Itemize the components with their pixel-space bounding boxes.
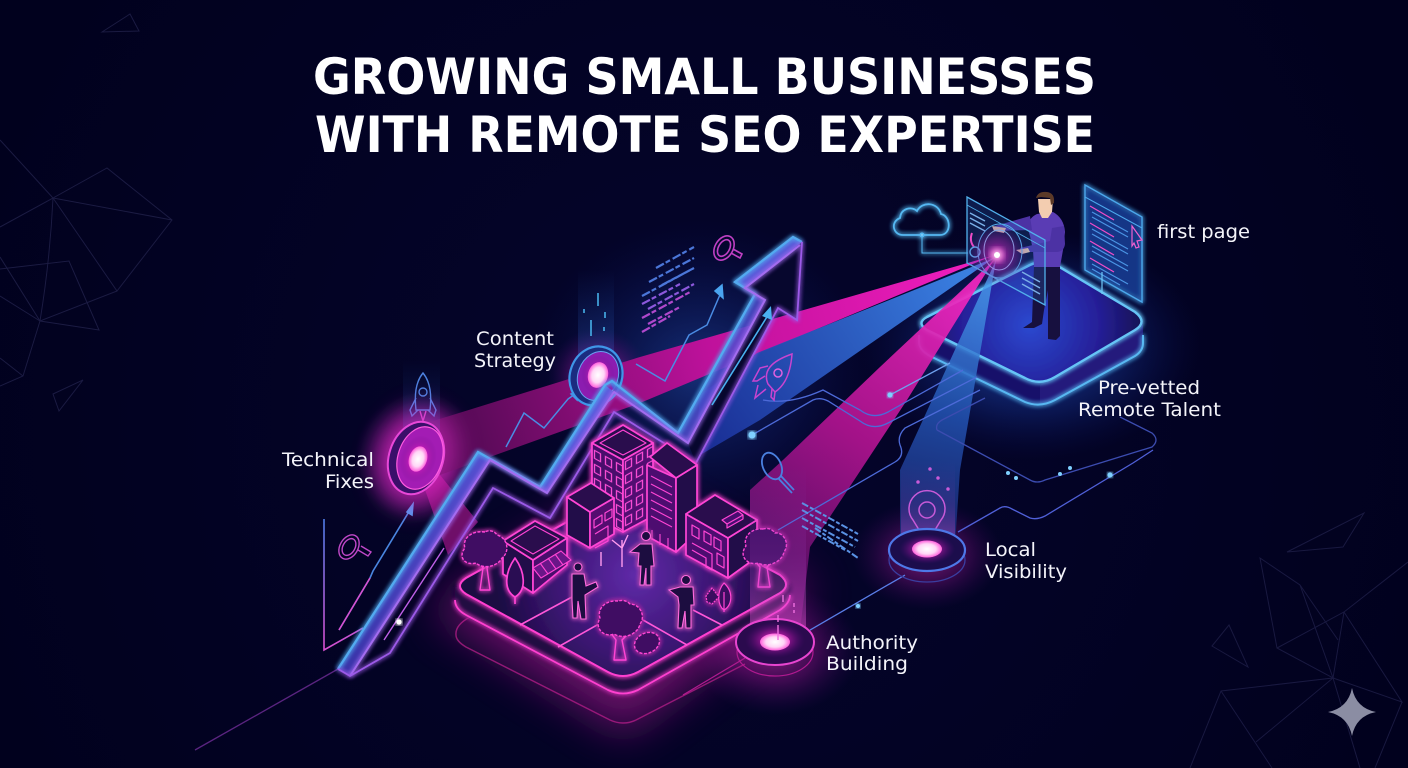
icon: location pin [909, 468, 949, 543]
striped tower [647, 443, 697, 552]
small trend arrow middle [506, 391, 578, 447]
focal glow [965, 223, 1029, 287]
circuit nodes [748, 392, 1112, 608]
right office [686, 495, 757, 578]
title [313, 48, 1096, 164]
hair [1036, 192, 1054, 205]
label: pre-vetted remote talent [1078, 377, 1221, 421]
screen panel: right document [1085, 185, 1142, 302]
code text block near city [802, 503, 858, 558]
background glows [355, 220, 1200, 735]
label: authority building [826, 632, 918, 675]
head [1038, 199, 1053, 218]
circuit lines [195, 363, 1156, 750]
signpost [601, 535, 628, 567]
label: authority building: Building [826, 653, 908, 675]
small shrub trees [706, 583, 731, 612]
label: first page: first page [1157, 221, 1250, 243]
label: content strategy [474, 328, 556, 372]
label: technical fixes [281, 449, 374, 493]
label: authority building: Authority [826, 632, 918, 654]
person standing center [630, 532, 654, 585]
small trend arrow lower left [324, 504, 413, 650]
tree cone [507, 558, 523, 604]
city platform [455, 494, 790, 694]
icon: cloud [894, 204, 968, 253]
shadow platform below city [456, 617, 745, 723]
tree front [598, 600, 663, 660]
tree left [462, 531, 507, 590]
beam: pink to content strategy [430, 256, 992, 475]
label: local visibility: Visibility [985, 561, 1067, 583]
icon: rocket technical fixes [410, 373, 436, 421]
icon: magnifier upper [710, 232, 742, 264]
title: GROWING SMALL BUSINESSES [313, 48, 1096, 106]
data particles: authority building [778, 595, 794, 640]
small trend arrow upper [636, 285, 723, 381]
label: technical fixes: Technical [281, 449, 374, 471]
node: content strategy [561, 339, 631, 413]
label: content strategy: Strategy [474, 350, 556, 372]
shop [503, 521, 571, 593]
node: authority building [736, 619, 814, 676]
person with tablet [572, 563, 598, 619]
tall tower [592, 425, 653, 532]
screen panel: left dashboard [967, 197, 1045, 305]
label: technical fixes: Fixes [325, 471, 374, 493]
low-poly decoration right [1190, 513, 1408, 768]
beam: blue to arrow [695, 258, 994, 458]
beam: pink to authority building [750, 260, 994, 630]
city buildings [462, 425, 786, 660]
glow column: authority building [750, 465, 806, 640]
low-poly decoration left [0, 14, 172, 411]
icon: rocket near arrow [753, 354, 792, 400]
label: pre-vetted remote talent: Remote Talent [1078, 399, 1221, 421]
node: technical fixes [362, 396, 470, 520]
label: local visibility: Local [985, 539, 1036, 561]
glow column: local visibility [901, 460, 955, 550]
code text block upper [642, 247, 694, 332]
icon: sparkle watermark [1328, 688, 1376, 736]
person: SEO expert [992, 192, 1065, 340]
node: local visibility [889, 529, 965, 582]
person gesturing [669, 576, 694, 628]
hands [992, 226, 1030, 254]
expert platform [919, 262, 1143, 405]
arms [994, 216, 1065, 252]
label: content strategy: Content [476, 328, 554, 350]
data particles: content strategy [584, 293, 605, 336]
glow column: content strategy [578, 270, 614, 370]
glow column: technical fixes [403, 360, 440, 450]
icon: magnifier near city [758, 450, 794, 493]
tree right [743, 528, 786, 587]
big growth arrow [338, 237, 802, 676]
title: WITH REMOTE SEO EXPERTISE [315, 106, 1095, 164]
legs [1023, 266, 1060, 340]
people in city [572, 532, 694, 628]
small office [567, 483, 614, 548]
beam: blue to local visibility [900, 260, 996, 545]
label: pre-vetted remote talent: Pre-vetted [1098, 377, 1200, 399]
beam stub below technical fixes [416, 464, 478, 555]
icon: magnifier lower left [335, 531, 371, 563]
torso [1027, 212, 1065, 267]
label: local visibility [985, 539, 1067, 583]
